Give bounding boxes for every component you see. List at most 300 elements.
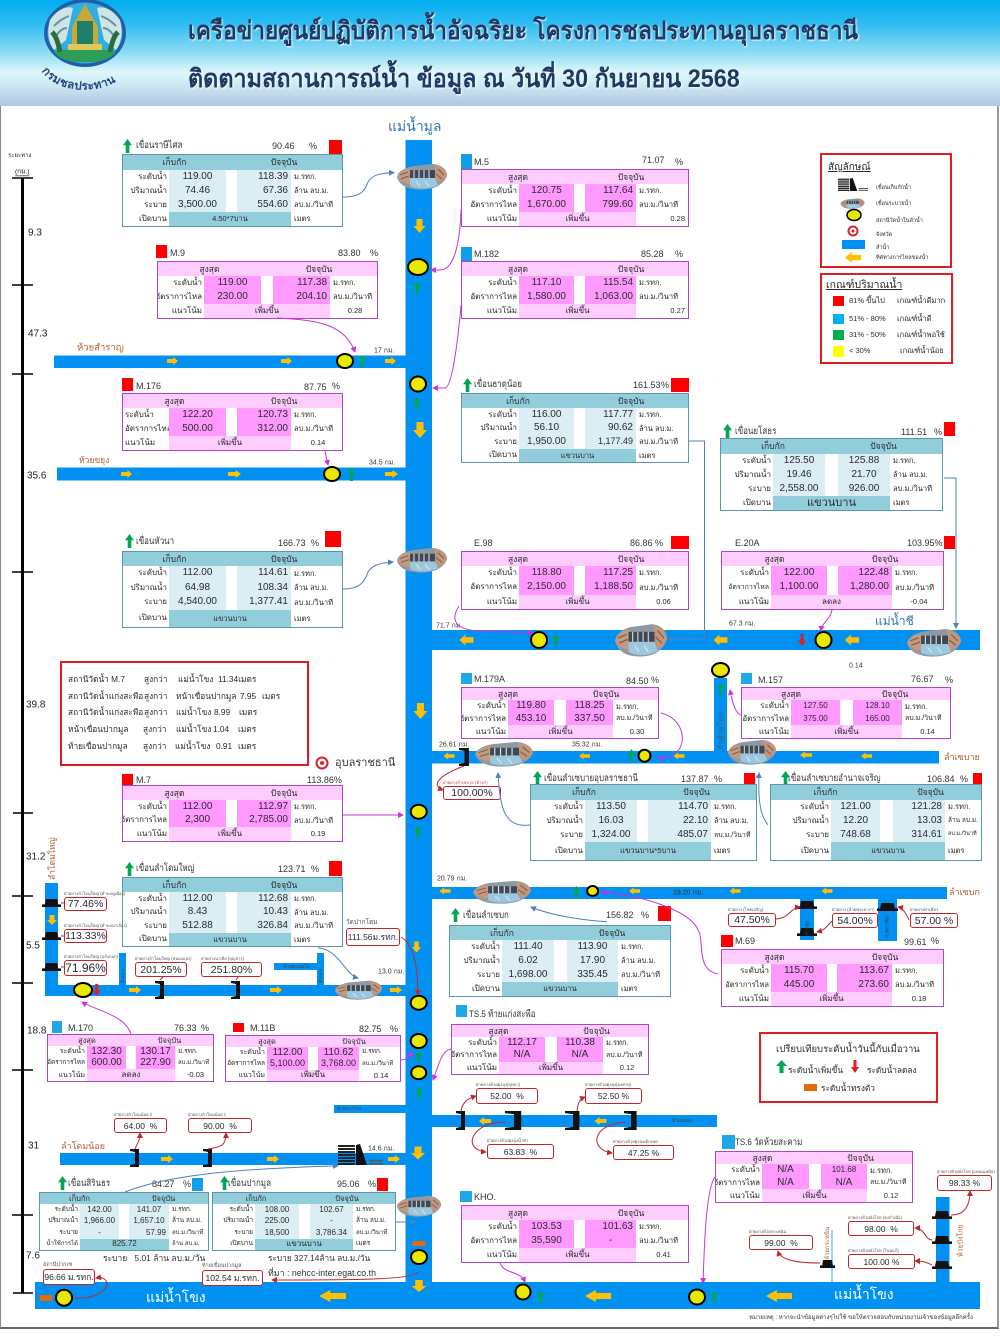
legend: symbols: เขื่อนระบายน้ำ: [876, 201, 911, 207]
table: อัตราการไหล: [470, 200, 517, 209]
table: 119.00: [218, 277, 247, 288]
table: เก็บกัก: [163, 880, 186, 890]
panel: M.170: 76.33: [174, 1023, 197, 1033]
table: ระดับน้ำ: [138, 568, 167, 577]
table: 120.75: [531, 185, 562, 196]
table: [225, 1035, 401, 1082]
Huai Samran: [54, 356, 406, 368]
table: เก็บกัก: [69, 1194, 90, 1203]
gauge: Tung Lung 3: ฝ่ายยางห้วยตุงลุงน้ำท่า: [487, 1138, 528, 1143]
table: 225.00: [265, 1216, 289, 1225]
table: 16.03: [598, 815, 624, 826]
Dom Yai tributaries: [119, 953, 324, 985]
table: 56.10: [534, 422, 559, 433]
legend swatches: [833, 296, 845, 360]
gauge: Tung Lung 4: [613, 1139, 674, 1160]
gauge: Dom Noi 1: 90.00 %: [203, 1120, 237, 1130]
gauge: Tung Lung 3: 63.83 %: [504, 1146, 537, 1156]
table: ระบาย: [806, 830, 829, 839]
legend: symbols: สถานีวัดน้ำในลำน้ำ: [876, 218, 923, 224]
legend: water criteria: เกณฑ์น้ำน้อย: [900, 346, 944, 355]
panel: M.69: %: [931, 936, 939, 946]
table: -0.04: [910, 597, 928, 606]
distance notes: 67.3 กม.: [729, 620, 755, 628]
distance labels: 7.6: [26, 1250, 40, 1262]
Se Bok tributaries: [800, 899, 897, 941]
table: 0.06: [656, 597, 671, 606]
table: 1,670.00: [527, 199, 566, 210]
distance labels: ระยะทาง: [8, 152, 32, 159]
table: ลบ.ม./วินาที: [948, 831, 977, 837]
table: 121.00: [840, 801, 871, 812]
table: ล้าน ลบ.ม.: [356, 1217, 386, 1224]
panel: E.98: E.98: [474, 538, 493, 548]
panel: M.11B: M.11B: [250, 1023, 275, 1033]
table: สูงสุด: [164, 396, 185, 406]
table: เมตร: [639, 450, 655, 460]
callout: level comparison with Mekong: เมตร: [238, 741, 256, 751]
panel: Huana dam: เขื่อนหัวนา: [136, 536, 174, 547]
table: ระดับน้ำ: [468, 1038, 497, 1047]
panel: Lam Se Bok dam: 156.82: [606, 910, 634, 920]
table: เปิดบาน: [230, 1240, 253, 1247]
Lam Se Bai: [432, 751, 939, 764]
panel: Sirindhorn dam: [39, 1176, 209, 1251]
panel: Lam Se Bai Ubon dam: %: [714, 774, 722, 784]
gauge: Pak Se station: [43, 1261, 95, 1285]
callout: level comparison with Mekong: 7.95: [240, 691, 256, 701]
distance labels: 5.5: [26, 940, 40, 952]
table: ระบาย: [234, 1228, 253, 1236]
table: สูงสุด: [199, 264, 220, 274]
table: ปัจจุบัน: [683, 787, 710, 797]
legend: water criteria: [820, 273, 953, 364]
panel: M.179A: M.179A: [474, 674, 505, 684]
table: 4,540.00: [178, 596, 217, 607]
table: [47, 1034, 214, 1082]
table: ล้าน ลบ.ม.: [621, 956, 656, 965]
gauge: Tung Lung 4: 47.25 %: [628, 1148, 659, 1158]
table: ม.รทก.: [893, 456, 916, 465]
table: 748.68: [840, 829, 871, 840]
Chi river: [432, 630, 980, 650]
legend: water criteria: เกณฑ์น้ำดี: [897, 314, 932, 323]
table: น้ำใช้การได้: [46, 1241, 78, 1247]
table: ระดับน้ำ: [488, 568, 517, 577]
panel: Huana dam: 166.73: [278, 538, 306, 548]
gauge: Lam Dom Yai 3: ฝ่ายยางลำโดมใหญ่ (แก้งกอก): [64, 954, 118, 959]
table: ม.รทก.: [639, 186, 662, 195]
table: 0.41: [656, 1250, 671, 1259]
gauge: Lam Dom Yai 1: [64, 891, 125, 911]
gauge: below Pak Mun dam: [202, 1261, 263, 1286]
river labels: ห้วยชุฎ: [804, 921, 810, 935]
Lam Dom Yai: [45, 883, 406, 996]
table: 141.07: [137, 1205, 161, 1214]
table: เก็บกัก: [490, 928, 514, 938]
table: เก็บกัก: [163, 554, 186, 564]
table: ปัจจุบัน: [618, 1208, 644, 1218]
river labels: ห้วยตะอนโต: [283, 963, 310, 970]
table: 1,698.00: [509, 969, 547, 980]
gauge: Kranin: ฝ่ายยางห้วยกระหนิน: [749, 1229, 786, 1234]
panel: Lam Se Bai Ubon dam: [530, 771, 757, 861]
province marker: Ubon Ratchathani: [316, 756, 395, 770]
table: 0.12: [620, 1063, 634, 1072]
table: ปัจจุบัน: [882, 689, 908, 699]
callout: level comparison with Mekong: สูงกว่า: [143, 724, 166, 734]
distance notes: 26.61 กม.: [439, 742, 469, 748]
panel: M.9: M.9: [170, 248, 185, 258]
table: ปริมาณน้ำ: [130, 907, 167, 916]
table: เพิ่มขึ้น: [565, 214, 590, 223]
gates: [42, 748, 952, 1269]
distance labels: [8, 152, 48, 1262]
gauge: Lam Dom Yai 4: 201.25%: [140, 964, 182, 976]
callout: level comparison with Mekong: สูงกว่า: [143, 741, 166, 751]
table: 67.36: [263, 185, 288, 196]
table: [741, 687, 951, 739]
table: เก็บกัก: [246, 1194, 266, 1203]
panel: M.179A: 84.50: [626, 676, 649, 686]
table: ลบ.ม./วินาที: [356, 1230, 387, 1236]
table: ลบ.ม./วินาที: [893, 484, 932, 493]
gauge: Lam Dom Yai 4: [135, 956, 192, 977]
table: 337.50: [574, 713, 605, 724]
panel: M.9: %: [370, 248, 378, 258]
panel: Lam Dom Yai dam: %: [311, 864, 319, 874]
table: 1,657.10: [133, 1216, 165, 1225]
table: แนวโน้ม: [730, 1191, 760, 1200]
panel: Lam Dom Yai dam: เขื่อนลำโดมใหญ่: [136, 863, 194, 874]
table: [720, 438, 943, 511]
gauge: Dom Noi 2: ฝ่ายยางลำโดมน้อย 2: [114, 1112, 152, 1117]
table: 0.18: [912, 994, 926, 1003]
table: ม.รทก.: [178, 1048, 198, 1055]
table: อัตราการไหล: [470, 292, 517, 301]
legend: water criteria: 51% - 80%: [849, 314, 886, 323]
Huai Khayung: [57, 468, 406, 480]
distance labels: 18.8: [27, 1026, 47, 1036]
callout: level comparison with Mekong: หน้าเขื่อนปากมูล: [68, 724, 128, 734]
gauge: Bang Koi 1: ฝ่ายยางห้วยบังโกย (ดงกำเมือ): [848, 1215, 902, 1220]
panel: M.69: 99.61: [904, 937, 927, 947]
legend: symbols: ทิศทางการไหลของน้ำ: [876, 255, 928, 261]
panel: M.7: M.7: [136, 775, 151, 785]
distance notes: 13.0 กม.: [378, 968, 404, 976]
discharge notes and source: ระบาย 327.14ล้าน ลบ.ม./วัน: [268, 1253, 370, 1263]
legend: water criteria: เกณฑ์น้ำพอใช้: [897, 330, 945, 339]
gauge: Huai Ta Tiao: 57.00 %: [915, 914, 953, 926]
table: ระดับน้ำ: [477, 701, 506, 710]
Mun river main stem: [406, 140, 432, 1290]
province marker: Ubon Ratchathani: อุบลราชธานี: [335, 757, 395, 769]
panel: Lam Se Bai Ubon dam: 137.87: [681, 774, 709, 784]
table: 125.50: [784, 455, 814, 466]
table: ปริมาณน้ำ: [223, 1217, 253, 1224]
panel: Huana dam: %: [311, 538, 319, 548]
table: ลบ.ม./วินาที: [639, 292, 678, 301]
table: ปัจจุบัน: [618, 264, 644, 274]
table: ปัจจุบัน: [618, 554, 644, 564]
river labels: แม่น้ำมูล: [388, 116, 442, 135]
legend: daily comparison: ระดับน้ำลดลง: [867, 1065, 917, 1075]
table: เพิ่มขึ้น: [548, 727, 573, 736]
river labels: ห้วยขยุง: [79, 455, 109, 466]
table: ระบาย: [144, 597, 167, 606]
Huai Kranin line: [831, 1230, 833, 1282]
table: ม.รทก.: [294, 802, 317, 811]
table: ระดับน้ำ: [138, 172, 167, 181]
gauge: Lam Dom Yai 2: 113.33%: [65, 930, 106, 942]
table: 165.00: [865, 714, 890, 723]
table: ระดับน้ำ: [173, 278, 202, 287]
table: -0.03: [187, 1070, 204, 1079]
table: เพิ่มขึ้น: [565, 597, 590, 606]
table: ลบ.ม./วินาที: [294, 598, 333, 606]
legend: symbols: [820, 153, 952, 268]
distance notes: 14.6 กม.: [368, 1146, 394, 1152]
table: ม.รทก.: [870, 1166, 893, 1175]
panel: M.176: 87.75: [304, 382, 327, 392]
legend: symbols: ลำน้ำ: [876, 245, 889, 251]
table: ลดลง: [822, 597, 841, 606]
table: ลบ.ม./วินาที: [905, 715, 941, 722]
table: ลบ.ม./วินาที: [178, 1060, 209, 1066]
Huai Tung Lung: [432, 1115, 717, 1127]
gauge: Bang Koi 1: 98.00 %: [864, 1224, 898, 1234]
table: 1,188.50: [594, 581, 633, 592]
table: 35,590: [531, 1235, 562, 1246]
table: 19.46: [786, 469, 812, 480]
table: ปัจจุบัน: [618, 396, 644, 406]
legend: water criteria: < 30%: [849, 346, 870, 355]
table: อัตราการไหล: [227, 1060, 265, 1067]
table: 74.46: [185, 185, 210, 196]
table: 825.72: [112, 1239, 137, 1248]
distance notes: 19.20 กม.: [673, 890, 703, 896]
table: [122, 393, 343, 451]
table: เมตร: [714, 846, 730, 855]
legend: daily comparison: ระดับน้ำทรงตัว: [821, 1083, 875, 1093]
table: 132.30: [91, 1046, 122, 1057]
table: [212, 1192, 396, 1251]
table: 110.38: [565, 1037, 595, 1048]
table: ระดับน้ำ: [138, 802, 167, 811]
table: 122.20: [182, 409, 213, 420]
table: 101.63: [602, 1221, 633, 1232]
table: 117.64: [603, 185, 633, 196]
table: ลบ.ม./วินาที: [639, 200, 678, 209]
table: ม.รทก.: [905, 702, 928, 711]
table: N/A: [777, 1164, 794, 1175]
table: ม.รทก.: [362, 1048, 382, 1055]
Lam Se Bok: [432, 887, 947, 899]
table: ระดับน้ำ: [554, 802, 583, 811]
table: ม.รทก.: [294, 410, 317, 419]
table: สูงสุด: [508, 554, 528, 564]
table: ระดับน้ำ: [740, 568, 769, 577]
table: สูงสุด: [488, 1026, 509, 1036]
panel: TS.6: [715, 1135, 913, 1203]
table: 0.27: [670, 306, 685, 315]
table: เพิ่มขึ้น: [301, 1070, 325, 1079]
gauge: Bang Koi 2: ฝ่ายยางห้วยบังโกย (โนนแก้): [848, 1248, 899, 1253]
gauge: Bang Koi 2: 100.00 %: [864, 1256, 899, 1266]
table: ปัจจุบัน: [342, 1037, 366, 1046]
table: เมตร: [294, 614, 310, 622]
table: 0.28: [348, 306, 362, 315]
table: ระดับน้ำ: [742, 456, 771, 465]
gauge: Bang Koi 2: [848, 1248, 915, 1269]
table: ระบาย: [144, 921, 167, 930]
table: สูงสุด: [508, 264, 528, 274]
table: 600.00: [91, 1058, 122, 1068]
table: ม.รทก.: [639, 278, 662, 287]
gauge: Bang Koi 3: 98.33 %: [949, 1178, 980, 1188]
panel: Yasothon dam: เขื่อนยโสธร: [735, 426, 776, 437]
table: 1,950.00: [527, 436, 566, 447]
dam icons: [335, 164, 961, 1217]
small stream near Lam Dom Noi: [334, 1105, 406, 1113]
table: 118.39: [258, 171, 288, 182]
table: แนวโน้ม: [467, 1063, 497, 1072]
panel: Lam Se Bai Ubon dam: เขื่อนลำเซบายอุบลราชธานี: [544, 773, 638, 784]
Mekong river: [35, 1282, 980, 1309]
table: ระบาย: [144, 200, 167, 209]
table: เก็บกัก: [761, 441, 785, 451]
gauge connectors: [61, 766, 970, 1298]
table: สูงสุด: [764, 952, 785, 962]
panel: E.98: 86.86: [630, 538, 653, 548]
table: แขวนบาน: [807, 496, 856, 508]
table: 1,377.41: [249, 596, 288, 607]
table: 114.70: [678, 801, 708, 812]
panel: Pak Mun dam: เขื่อนปากมูล: [228, 1178, 271, 1189]
table: [461, 687, 659, 739]
river labels: ห้วยบวง: [120, 969, 125, 983]
table: เมตร: [948, 846, 964, 855]
table: เพิ่มขึ้น: [565, 306, 590, 315]
table: [461, 393, 689, 463]
panel: E.20A: E.20A: [735, 538, 760, 548]
table: 112.17: [507, 1037, 537, 1048]
table: ลบ.ม./วินาที: [616, 715, 652, 722]
table: ปัจจุบัน: [271, 788, 297, 798]
panel: Lam Se Bok dam: %: [641, 910, 649, 920]
table: ปัจจุบัน: [271, 157, 297, 167]
callout: level comparison with Mekong: เมตร: [239, 707, 257, 717]
gauge: Tung Lung 1: [476, 1082, 538, 1104]
table: เก็บกัก: [163, 157, 186, 167]
table: เมตร: [294, 214, 310, 223]
table: ลบ.ม./วินาที: [621, 970, 660, 979]
panel: M.5: 71.07: [642, 155, 665, 165]
table: สูงสุด: [508, 1208, 528, 1218]
panel: Sirindhorn dam: 84.27: [152, 1179, 175, 1189]
Huai Bang Koi: [936, 1197, 950, 1283]
table: 453.10: [516, 713, 546, 724]
table: แขวนบาน: [213, 614, 247, 622]
legend icons: [832, 165, 892, 265]
table: [451, 1024, 649, 1075]
table: 1,324.00: [592, 829, 630, 840]
table: ลบ.ม./วินาที: [362, 1061, 393, 1067]
callout: level comparison with Mekong: แม่น้ำโขง: [178, 674, 213, 684]
table: แนวโน้ม: [239, 1072, 265, 1079]
panel: TS.6: TS.6 วัดห้วยสะคาม: [735, 1137, 802, 1148]
table: เพิ่มขึ้น: [819, 994, 844, 1003]
table: 116.00: [532, 409, 561, 420]
river labels: แม่น้ำโขง: [146, 1287, 206, 1305]
table: เมตร: [621, 984, 637, 993]
logo: Royal Irrigation Department: [42, 0, 126, 90]
gauge: Ban Bua: ฝ่ายยางนาเยีย (บุญสาร): [201, 956, 244, 961]
river labels: ลำโดมใหญ่: [47, 837, 57, 880]
table: ระดับน้ำ: [488, 186, 517, 195]
table: ลบ.ม./วินาที: [895, 980, 934, 989]
table: 118.25: [575, 700, 604, 711]
water level stations: [56, 259, 832, 1306]
table: 121.28: [911, 801, 942, 812]
gauge: below Pak Mun dam: 102.54 ม.รทก.: [205, 1273, 260, 1283]
table: เพิ่มขึ้น: [802, 1191, 827, 1200]
gauge: Wat Pak Dom: 111.56ม.รทก.: [348, 932, 398, 942]
table: 2,558.00: [780, 483, 818, 494]
panel: M.9: 83.80: [338, 248, 361, 258]
table: ระบาย: [477, 970, 500, 979]
table: 13.03: [917, 815, 942, 826]
title line 1: เครือข่ายศูนย์ปฏิบัติการน้ำอัจฉริยะ โครงการชลประทานอุบลราชธานี: [188, 17, 858, 45]
panel: M.182: [461, 247, 689, 319]
panel: M.157: M.157: [758, 675, 783, 685]
table: ลบ.ม./วินาที: [714, 832, 750, 838]
table: แนวโน้ม: [739, 597, 769, 606]
table: ลบ.ม./วินาที: [895, 583, 934, 592]
table: [122, 785, 343, 842]
callout: level comparison with Mekong: หน้าเขื่อนปากมูล: [176, 691, 236, 701]
gauge: Huai Ta Tiao: [910, 907, 958, 928]
table: แขวนบาน: [543, 984, 577, 993]
table: 926.00: [849, 483, 879, 494]
panel: M.170: M.170: [68, 1023, 93, 1033]
table: แนวโน้ม: [739, 994, 769, 1003]
table: 1,580.00: [527, 291, 566, 302]
panel: Thatu Noi dam: 161.53: [633, 380, 661, 390]
panel: M.179A: [461, 673, 659, 739]
distance scale: [12, 178, 33, 1293]
gauge: Dom Noi 2: [114, 1112, 167, 1133]
panel: Lam Dom Yai dam: 123.71: [278, 864, 306, 874]
panel: E.98: [461, 536, 689, 610]
legend: symbols: จังหวัด: [876, 232, 892, 238]
panel: M.176: M.176: [136, 381, 161, 391]
panel: Lam Dom Yai dam: [122, 861, 343, 947]
panel: KHO.: [460, 1191, 689, 1263]
river labels: ลำโดมน้อย: [61, 1141, 105, 1151]
table: ระดับน้ำ: [125, 410, 154, 419]
table: 122.48: [858, 567, 889, 578]
table: แนวโน้ม: [487, 597, 517, 606]
table: แขวนบาน: [286, 1239, 322, 1248]
table: เพิ่มขึ้น: [565, 1250, 590, 1259]
gauge: Huai Chu 2: 54.00%: [837, 914, 873, 926]
table: แนวโน้ม: [487, 306, 517, 315]
table: ปัจจุบัน: [335, 1194, 359, 1203]
table: ลบ.ม./วินาที: [294, 424, 333, 433]
table: 117.10: [532, 277, 561, 288]
table: ระดับน้ำ: [230, 1206, 253, 1212]
